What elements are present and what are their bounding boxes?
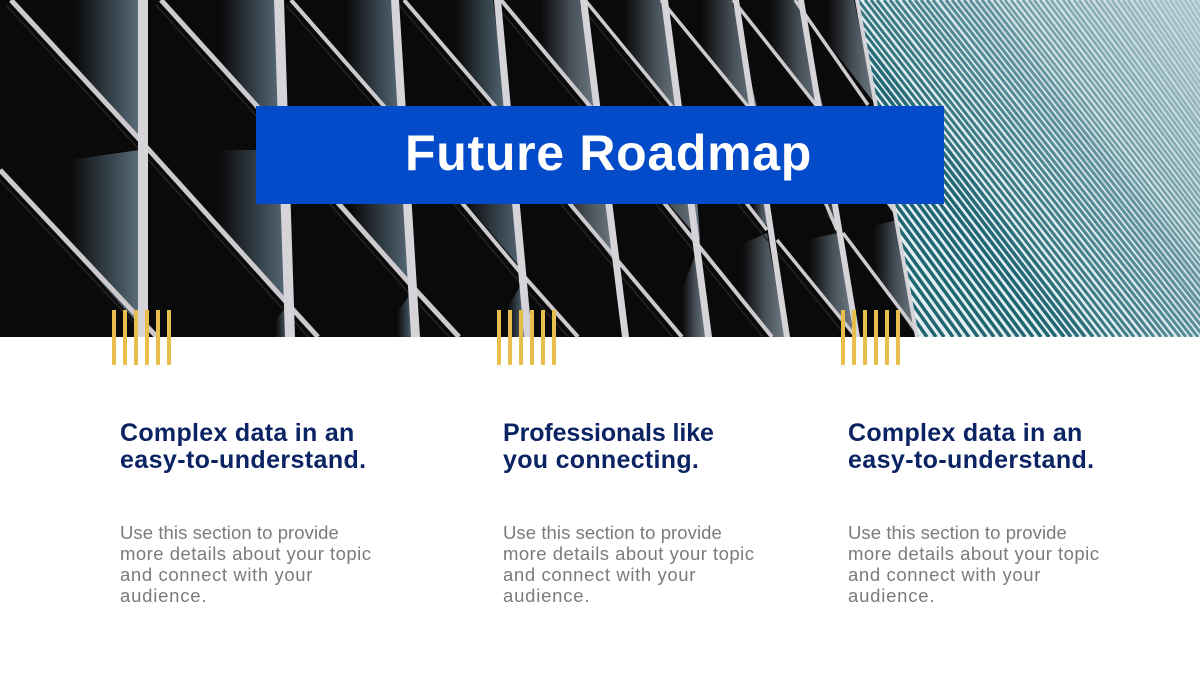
column 3 heading [848,419,1095,474]
column 2 [503,419,754,606]
column 1 body text: and connect with your [120,564,313,585]
column 3 body text: audience. [848,585,935,606]
column 3 body text [848,522,1099,606]
column 1 body text: audience. [120,585,207,606]
column 3 [848,419,1099,606]
column 2 body text: and connect with your [503,564,696,585]
title banner [256,106,944,204]
column 2 heading: Professionals like [503,419,714,447]
column 3 heading: easy-to-understand. [848,446,1095,474]
column 3 body text: Use this section to provide [848,522,1067,543]
accent ticks: column 1 [112,310,171,365]
column 2 body text [503,522,754,606]
column 3 body text: and connect with your [848,564,1041,585]
column 1 heading: Complex data in an [120,419,355,447]
column 2 heading [503,419,714,474]
column 3 body text: more details about your topic [848,543,1099,564]
column 1 [120,419,371,606]
accent ticks: column 2 [497,310,556,365]
column 2 body text: more details about your topic [503,543,754,564]
column 1 body text: more details about your topic [120,543,371,564]
accent ticks: column 3 [841,310,900,365]
header photo: building facade [0,0,1200,337]
column 3 heading: Complex data in an [848,419,1083,447]
column 1 heading [120,419,367,474]
column 1 body text: Use this section to provide [120,522,339,543]
column 1 body text [120,522,371,606]
title: Future Roadmap [405,125,812,181]
column 2 body text: Use this section to provide [503,522,722,543]
column 1 heading: easy-to-understand. [120,446,367,474]
column 2 heading: you connecting. [503,446,699,474]
column 2 body text: audience. [503,585,590,606]
